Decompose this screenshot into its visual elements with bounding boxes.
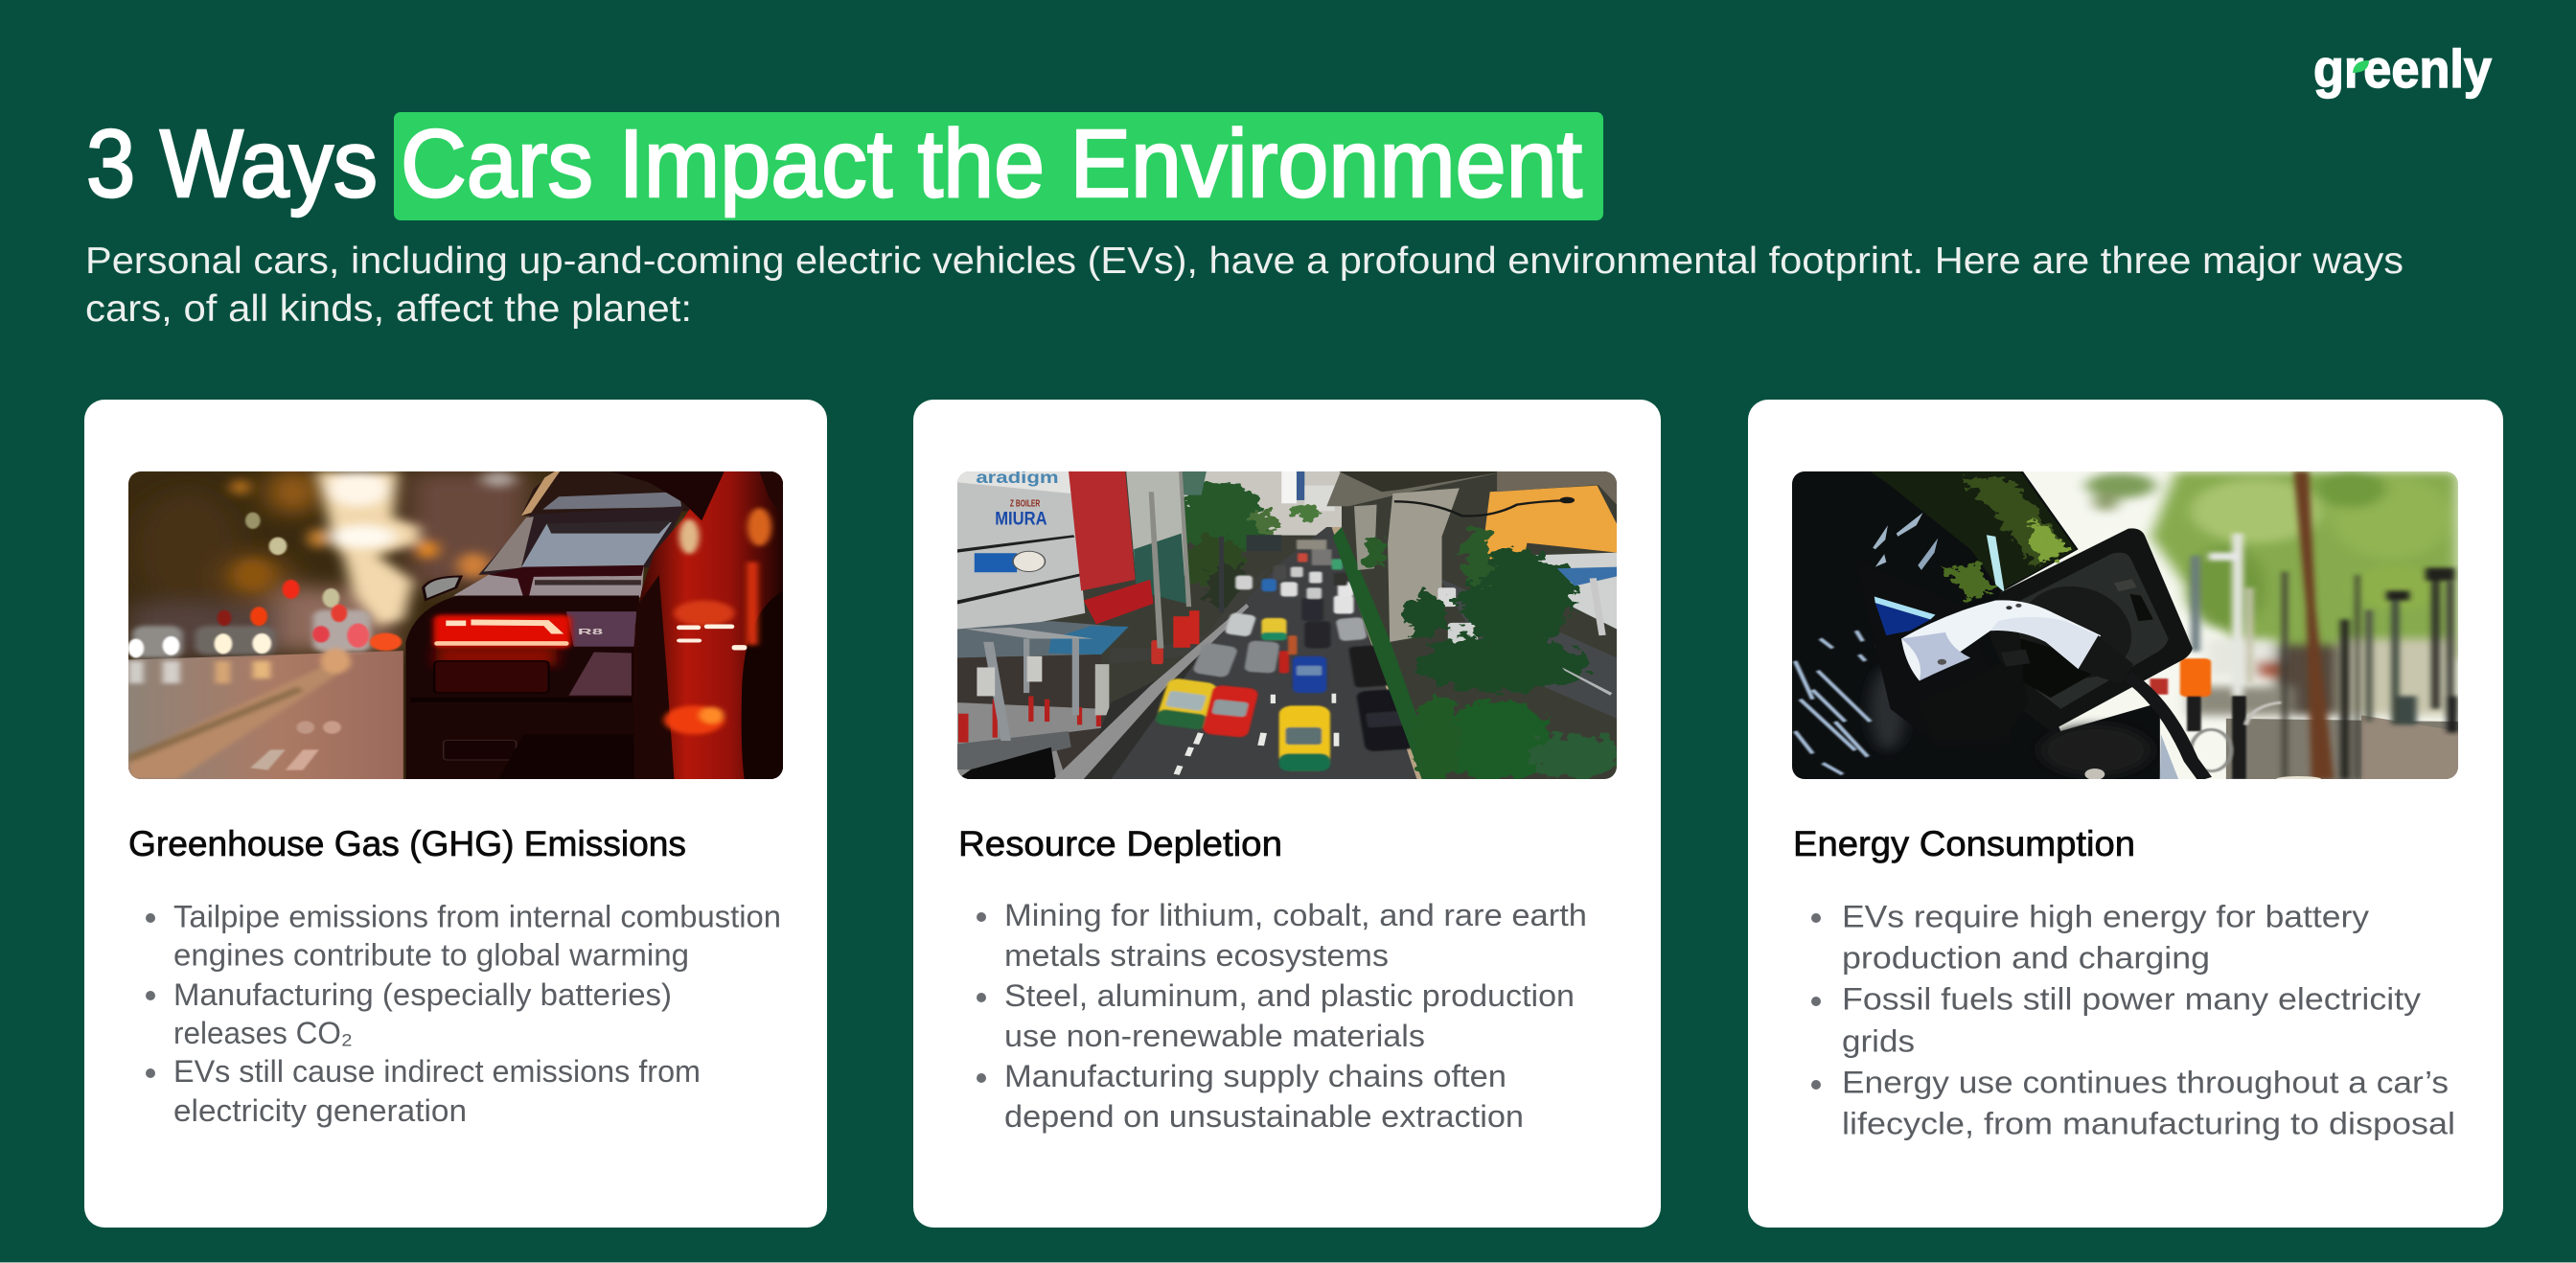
panel: greenhouse gas emissions xyxy=(84,400,827,1228)
bullet list: EVs still cause indirect emissions from xyxy=(173,1054,701,1089)
bullet list: lifecycle, from manufacturing to disposal xyxy=(1842,1106,2455,1140)
photo: city traffic jam from overpass xyxy=(957,468,1620,782)
bullet list: use non-renewable materials xyxy=(1004,1019,1425,1053)
logo: greenly: greenly xyxy=(2313,38,2492,99)
heading: Energy Consumption xyxy=(1793,824,2135,863)
bullet list: Fossil fuels still power many electricity xyxy=(1842,981,2421,1016)
title highlight: Cars Impact the Environment xyxy=(401,110,1582,218)
title: 3 Ways xyxy=(86,110,378,218)
panel: resource depletion xyxy=(913,400,1661,1228)
bullet list: engines contribute to global warming xyxy=(173,937,689,972)
heading: Greenhouse Gas (GHG) Emissions xyxy=(128,824,686,863)
bullet list: grids xyxy=(1842,1023,1915,1058)
bullet list xyxy=(146,899,781,1128)
intro text: Personal cars, including up-and-coming electric vehicles (EVs), have a profound environmental footprint. Here are three major ways xyxy=(85,241,2404,282)
bullet list xyxy=(1811,899,2455,1140)
photo: red sports car taillights at dusk: R8 xyxy=(578,628,603,636)
bullet list: Mining for lithium, cobalt, and rare earth xyxy=(1004,898,1587,932)
panel: energy consumption xyxy=(1748,400,2503,1228)
photo: electric car charging plug xyxy=(1792,470,2458,782)
bullet list: EVs require high energy for battery xyxy=(1842,899,2369,933)
heading: Resource Depletion xyxy=(958,824,1282,863)
photo: city traffic jam from overpass: Z BOILER xyxy=(1010,497,1041,509)
bullet list: Manufacturing supply chains often xyxy=(1004,1059,1506,1093)
intro text xyxy=(85,241,2404,330)
bullet list: Energy use continues throughout a car’s xyxy=(1842,1066,2449,1100)
bullet list: Manufacturing (especially batteries) xyxy=(173,977,672,1012)
bullet list: depend on unsustainable extraction xyxy=(1004,1099,1524,1134)
bullet list: Steel, aluminum, and plastic production xyxy=(1004,978,1575,1013)
photo: city traffic jam from overpass: MIURA xyxy=(995,509,1047,529)
bullet list: electricity generation xyxy=(173,1093,467,1128)
bullet list: metals strains ecosystems xyxy=(1004,938,1389,973)
photo: city traffic jam from overpass: aradigm xyxy=(976,468,1059,487)
bullet list xyxy=(977,898,1587,1134)
bullet list: production and charging xyxy=(1842,941,2210,976)
intro text: cars, of all kinds, affect the planet: xyxy=(85,288,692,330)
bullet list: Tailpipe emissions from internal combustion xyxy=(173,899,781,933)
bullet list: releases CO₂ xyxy=(173,1016,353,1050)
title xyxy=(86,110,1603,220)
photo: red sports car taillights at dusk xyxy=(127,470,783,779)
